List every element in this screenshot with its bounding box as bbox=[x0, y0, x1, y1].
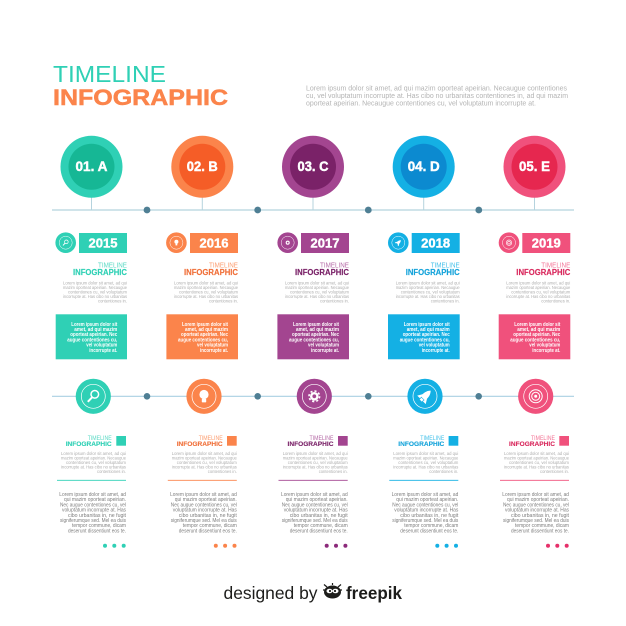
text block: mazim oporteat apeirian. Necaugue bbox=[63, 285, 127, 290]
callout box: Lorem ipsum dolor sit bbox=[293, 322, 339, 328]
body text: Lorem ipsum dolor sit amet, ad bbox=[502, 492, 569, 498]
icon: light bulb bbox=[186, 379, 222, 414]
heading: TIMELINE bbox=[98, 260, 127, 270]
text block: incorrupte at. Has cibo no urbanitas bbox=[396, 294, 460, 299]
heading with square: INFOGRAPHIC bbox=[509, 441, 555, 448]
heading with square bbox=[288, 435, 348, 448]
heading: TIMELINE bbox=[431, 260, 460, 270]
heading with square: INFOGRAPHIC bbox=[177, 441, 223, 448]
text block: Lorem ipsum dolor sit amet, ad qui bbox=[285, 280, 349, 286]
callout box: vel voluptatum bbox=[197, 343, 228, 349]
text block: mazim oporteat apeirian. Necaugue bbox=[61, 455, 126, 460]
callout box: Lorem ipsum dolor sit bbox=[514, 322, 560, 328]
text block: contentiones cu, vel voluptatum bbox=[288, 460, 348, 465]
text block: contentiones in. bbox=[208, 469, 237, 474]
text block bbox=[396, 280, 460, 304]
text block bbox=[174, 280, 239, 304]
text block: incorrupte at. Has cibo no urbanitas bbox=[285, 294, 350, 299]
text block: Lorem ipsum dolor sit amet, ad qui bbox=[283, 451, 348, 456]
callout box: augue contentiones cu, bbox=[400, 337, 450, 343]
text block: contentiones cu, vel voluptatum bbox=[509, 460, 569, 465]
body text: tempor commune, dicam bbox=[404, 523, 459, 529]
heading with square: INFOGRAPHIC bbox=[398, 441, 444, 448]
icon: target bbox=[518, 379, 553, 414]
body text: cibo urbanitas in, ne fugit bbox=[179, 513, 237, 519]
body text: Nec augue contentiones cu, vel bbox=[392, 502, 458, 508]
body text: Nec augue contentiones cu, vel bbox=[503, 502, 569, 508]
heading with square: TIMELINE bbox=[310, 435, 334, 442]
heading with square bbox=[66, 435, 126, 448]
pagination dots bbox=[103, 544, 126, 548]
body text: Nec augue contentiones cu, vel bbox=[60, 502, 126, 508]
body text: qui mazim oporteat apeirian. bbox=[286, 497, 348, 503]
milestone circle 02. B: 02. B bbox=[187, 159, 218, 174]
callout box: oporteat apeirian. Nec bbox=[181, 332, 228, 338]
body text: voluptatum incorrupte at. Has bbox=[173, 508, 237, 514]
text block: contentiones cu, vel voluptatum bbox=[66, 460, 126, 465]
year badge 2018: 2018 bbox=[421, 236, 450, 250]
body text: Nec augue contentiones cu, vel bbox=[282, 502, 348, 508]
callout box bbox=[277, 314, 349, 359]
callout box: vel voluptatum bbox=[308, 343, 339, 349]
text block: mazim oporteat apeirian. Necaugue bbox=[393, 455, 459, 460]
heading with square bbox=[398, 435, 458, 448]
body text bbox=[170, 492, 237, 534]
body text: voluptatum incorrupte at. Has bbox=[62, 508, 126, 514]
heading: TIMELINE bbox=[541, 260, 570, 270]
text block: contentiones in. bbox=[540, 469, 569, 474]
body text: signiferumque sed. Mel ea duis bbox=[282, 518, 348, 524]
body text: cibo urbanitas in, ne fugit bbox=[68, 513, 126, 519]
body text: deserunt dissentiunt eos te. bbox=[290, 528, 348, 534]
panel: 2016 upper column bbox=[166, 232, 239, 359]
heading with square: TIMELINE bbox=[199, 435, 223, 442]
text block: Lorem ipsum dolor sit amet, ad qui bbox=[504, 451, 569, 456]
footer credit bbox=[224, 583, 402, 603]
heading with square: TIMELINE bbox=[531, 435, 555, 442]
heading bbox=[516, 260, 571, 277]
panel: lower column 5 bbox=[500, 435, 570, 548]
heading bbox=[406, 260, 460, 277]
footer credit: designed by bbox=[224, 583, 318, 603]
body text: voluptatum incorrupte at. Has bbox=[284, 508, 348, 514]
year badge 2016: 2016 bbox=[200, 236, 228, 250]
text block: contentiones in. bbox=[209, 299, 238, 304]
heading: TIMELINE bbox=[209, 260, 238, 270]
text block: mazim oporteat apeirian. Necaugue bbox=[172, 455, 237, 460]
text block: mazim oporteat apeirian. Necaugue bbox=[504, 455, 569, 460]
text block: contentiones in. bbox=[541, 299, 570, 304]
pagination dots bbox=[546, 544, 569, 548]
milestone circle 05. E: 05. E bbox=[519, 159, 550, 174]
text block bbox=[63, 280, 128, 304]
text block: Lorem ipsum dolor sit amet, ad qui bbox=[506, 280, 570, 286]
panel: 2019 upper column bbox=[499, 232, 571, 359]
body text: voluptatum incorrupte at. Has bbox=[505, 508, 569, 514]
body text: deserunt dissentiunt eos te. bbox=[68, 528, 126, 534]
heading bbox=[295, 260, 349, 277]
callout box: vel voluptatum bbox=[86, 343, 117, 349]
text block: contentiones in. bbox=[429, 469, 458, 474]
text block bbox=[285, 280, 350, 304]
callout box: Lorem ipsum dolor sit bbox=[182, 322, 228, 328]
body text: qui mazim oporteat apeirian. bbox=[64, 497, 126, 503]
body text: deserunt dissentiunt eos te. bbox=[400, 528, 458, 534]
text block: mazim oporteat apeirian. Necaugue bbox=[283, 455, 348, 460]
callout box: Lorem ipsum dolor sit bbox=[404, 322, 450, 328]
body text: signiferumque sed. Mel ea duis bbox=[60, 518, 126, 524]
icon: freepik mascot bbox=[323, 583, 342, 598]
text block: incorrupte at. Has cibo no urbanitas bbox=[393, 464, 459, 470]
text block: incorrupte at. Has cibo no urbanitas bbox=[506, 294, 571, 299]
panel: lower column 4 bbox=[389, 435, 459, 548]
text block bbox=[61, 451, 127, 474]
milestone circle 01. A bbox=[60, 136, 122, 198]
body text bbox=[59, 492, 126, 534]
body text: tempor commune, dicam bbox=[294, 523, 348, 529]
body text: tempor commune, dicam bbox=[515, 523, 569, 529]
callout box: vel voluptatum bbox=[529, 343, 560, 349]
heading with square bbox=[509, 435, 569, 448]
text block: Lorem ipsum dolor sit amet, ad qui bbox=[172, 451, 237, 456]
callout box: augue contentiones cu, bbox=[289, 337, 339, 343]
milestone circle 02. B bbox=[171, 136, 233, 198]
callout box: oporteat apeirian. Nec bbox=[70, 332, 117, 338]
text block: contentiones cu, vel voluptatum bbox=[511, 290, 570, 295]
panel: lower column 2 bbox=[168, 435, 237, 548]
text block: mazim oporteat apeirian. Necaugue bbox=[506, 285, 571, 290]
text block: mazim oporteat apeirian. Necaugue bbox=[396, 285, 460, 290]
text block: contentiones in. bbox=[319, 469, 348, 474]
body text: signiferumque sed. Mel ea duis bbox=[392, 518, 459, 524]
callout box: oporteat apeirian. Nec bbox=[292, 332, 339, 338]
text block: incorrupte at. Has cibo no urbanitas bbox=[63, 294, 128, 299]
callout box: amet, ad qui mazim bbox=[74, 327, 117, 333]
callout box bbox=[166, 314, 238, 359]
callout box: vel voluptatum bbox=[419, 343, 450, 349]
text block bbox=[283, 451, 348, 474]
body text bbox=[392, 492, 459, 534]
panel: 2018 upper column bbox=[388, 232, 460, 359]
text block: contentiones in. bbox=[98, 299, 127, 304]
body text: voluptatum incorrupte at. Has bbox=[394, 508, 459, 514]
text block: Lorem ipsum dolor sit amet, ad qui bbox=[393, 451, 458, 456]
callout box: incorrupte at. bbox=[89, 348, 118, 354]
text block: incorrupte at. Has cibo no urbanitas bbox=[283, 464, 348, 470]
callout box: incorrupte at. bbox=[311, 348, 339, 354]
callout box: augue contentiones cu, bbox=[67, 337, 118, 343]
milestone circle 05. E bbox=[504, 136, 566, 198]
text block: contentiones cu, vel voluptatum bbox=[179, 290, 238, 295]
icon: magnifier bbox=[76, 379, 111, 414]
milestone circle 03. C bbox=[282, 136, 344, 198]
pagination dots bbox=[214, 544, 236, 548]
text block: contentiones cu, vel voluptatum bbox=[177, 460, 237, 465]
body text: Lorem ipsum dolor sit amet, ad bbox=[392, 492, 458, 498]
text block bbox=[393, 451, 459, 474]
body text: signiferumque sed. Mel ea duis bbox=[503, 518, 569, 524]
panel: lower column 1 bbox=[57, 435, 127, 548]
milestone circle 04. D bbox=[393, 136, 455, 198]
heading: INFOGRAPHIC bbox=[406, 268, 460, 277]
intro text block: cu, vel voluptatum incorrupte at. Has cibo no urbanitas contentiones in, ad qui mazim bbox=[306, 93, 568, 100]
title bbox=[53, 61, 228, 110]
milestone circle 03. C: 03. C bbox=[298, 159, 329, 174]
heading with square bbox=[177, 435, 237, 448]
body text: deserunt dissentiunt eos te. bbox=[511, 528, 569, 534]
icon: rocket bbox=[407, 379, 443, 414]
body text: qui mazim oporteat apeirian. bbox=[507, 497, 569, 503]
heading: INFOGRAPHIC bbox=[516, 268, 571, 277]
upper timeline axis bbox=[52, 197, 574, 213]
intro text block: Lorem ipsum dolor sit amet, ad qui mazim oporteat apeirian. Necaugue contentiones bbox=[306, 86, 567, 92]
body text: cibo urbanitas in, ne fugit bbox=[511, 513, 569, 519]
footer credit: freepik bbox=[346, 583, 402, 603]
year badge 2015: 2015 bbox=[88, 236, 118, 250]
panel: 2017 upper column bbox=[277, 232, 350, 359]
text block: mazim oporteat apeirian. Necaugue bbox=[174, 285, 238, 290]
text block: mazim oporteat apeirian. Necaugue bbox=[285, 285, 349, 290]
heading: INFOGRAPHIC bbox=[184, 268, 238, 277]
pagination dots bbox=[325, 544, 347, 548]
callout box: amet, ad qui mazim bbox=[407, 327, 450, 333]
callout box: amet, ad qui mazim bbox=[296, 327, 339, 333]
body text: cibo urbanitas in, ne fugit bbox=[400, 513, 459, 519]
title: INFOGRAPHIC bbox=[53, 85, 228, 110]
text block: Lorem ipsum dolor sit amet, ad qui bbox=[396, 280, 460, 286]
heading bbox=[73, 260, 127, 277]
text block: incorrupte at. Has cibo no urbanitas bbox=[172, 464, 237, 470]
lower timeline axis bbox=[52, 393, 574, 400]
body text: Nec augue contentiones cu, vel bbox=[171, 502, 237, 508]
callout box bbox=[388, 314, 460, 359]
callout box: incorrupte at. bbox=[532, 348, 561, 354]
heading: INFOGRAPHIC bbox=[295, 268, 349, 277]
heading: INFOGRAPHIC bbox=[73, 268, 127, 277]
pagination dots bbox=[435, 544, 458, 548]
callout box bbox=[499, 314, 570, 359]
heading bbox=[184, 260, 238, 277]
text block: contentiones in. bbox=[97, 469, 126, 474]
body text: Lorem ipsum dolor sit amet, ad bbox=[281, 492, 348, 498]
panel: lower column 3 bbox=[278, 435, 348, 548]
text block bbox=[172, 451, 237, 474]
callout box: augue contentiones cu, bbox=[178, 337, 228, 343]
body text: Lorem ipsum dolor sit amet, ad bbox=[59, 492, 126, 498]
heading with square: TIMELINE bbox=[420, 435, 444, 442]
icon: gear bbox=[297, 379, 332, 414]
heading with square: INFOGRAPHIC bbox=[66, 441, 112, 448]
text block: contentiones cu, vel voluptatum bbox=[290, 290, 349, 295]
body text bbox=[502, 492, 569, 534]
heading: TIMELINE bbox=[320, 260, 349, 270]
body text: cibo urbanitas in, ne fugit bbox=[290, 513, 348, 519]
body text: qui mazim oporteat apeirian. bbox=[396, 497, 458, 503]
body text: tempor commune, dicam bbox=[72, 523, 126, 529]
callout box: amet, ad qui mazim bbox=[185, 327, 228, 333]
text block: contentiones cu, vel voluptatum bbox=[401, 290, 460, 295]
text block: incorrupte at. Has cibo no urbanitas bbox=[61, 464, 127, 470]
callout box bbox=[56, 314, 127, 359]
heading with square: TIMELINE bbox=[88, 435, 112, 442]
text block bbox=[504, 451, 570, 474]
title: TIMELINE bbox=[53, 61, 166, 87]
intro text block bbox=[306, 86, 568, 108]
body text bbox=[281, 492, 348, 534]
text block: contentiones in. bbox=[431, 299, 460, 304]
text block: Lorem ipsum dolor sit amet, ad qui bbox=[174, 280, 238, 286]
body text: tempor commune, dicam bbox=[183, 523, 237, 529]
body text: deserunt dissentiunt eos te. bbox=[179, 528, 237, 534]
milestone circle 01. A: 01. A bbox=[76, 159, 108, 174]
panel: 2015 upper column bbox=[55, 232, 128, 359]
milestone circle 04. D: 04. D bbox=[408, 159, 440, 174]
text block: Lorem ipsum dolor sit amet, ad qui bbox=[63, 280, 127, 286]
year badge 2019: 2019 bbox=[532, 236, 561, 250]
callout box: augue contentiones cu, bbox=[510, 337, 561, 343]
text block: contentiones in. bbox=[320, 299, 349, 304]
body text: Lorem ipsum dolor sit amet, ad bbox=[170, 492, 237, 498]
body text: qui mazim oporteat apeirian. bbox=[175, 497, 237, 503]
text block: contentiones cu, vel voluptatum bbox=[398, 460, 458, 465]
callout box: incorrupte at. bbox=[200, 348, 228, 354]
text block: incorrupte at. Has cibo no urbanitas bbox=[174, 294, 239, 299]
heading with square: INFOGRAPHIC bbox=[288, 441, 334, 448]
text block: contentiones cu, vel voluptatum bbox=[68, 290, 127, 295]
callout box: oporteat apeirian. Nec bbox=[403, 332, 450, 338]
text block: Lorem ipsum dolor sit amet, ad qui bbox=[61, 451, 126, 456]
intro text block: oporteat apeirian. Necaugue contentiones cu, vel voluptatum incorrupte at. bbox=[306, 100, 536, 108]
callout box: Lorem ipsum dolor sit bbox=[71, 322, 117, 328]
callout box: oporteat apeirian. Nec bbox=[513, 332, 560, 338]
text block bbox=[506, 280, 571, 304]
body text: signiferumque sed. Mel ea duis bbox=[171, 518, 237, 524]
text block: incorrupte at. Has cibo no urbanitas bbox=[504, 464, 570, 470]
callout box: amet, ad qui mazim bbox=[517, 327, 560, 333]
year badge 2017: 2017 bbox=[310, 236, 340, 250]
callout box: incorrupte at. bbox=[422, 348, 450, 354]
